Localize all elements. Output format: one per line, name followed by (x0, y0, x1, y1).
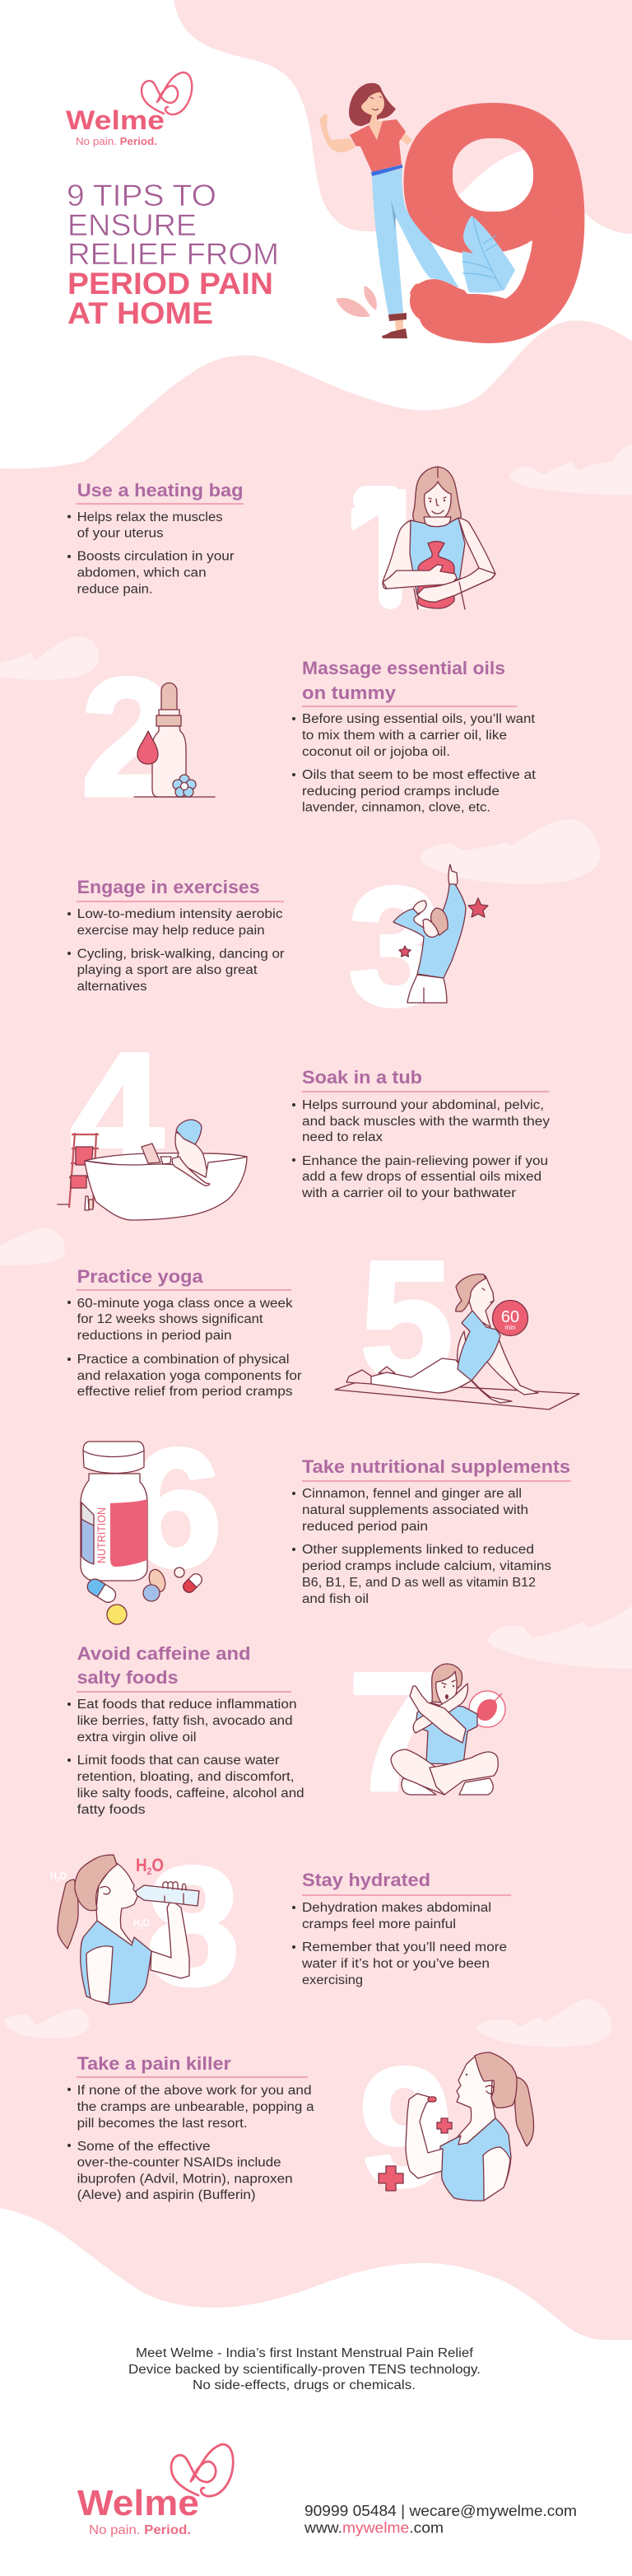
blue leaf (462, 216, 515, 293)
body text: water if it’s hot or you’ve been (301, 1957, 490, 1971)
body text: extra virgin olive oil (77, 1731, 197, 1745)
heading: Take nutritional supplements (302, 1456, 570, 1477)
closing statement: No side-effects, drugs or chemicals. (193, 2378, 416, 2392)
hero arm (319, 114, 356, 152)
hero jeans (372, 169, 459, 314)
body text: Eat foods that reduce inflammation (77, 1698, 297, 1712)
illustration: woman taking a pill (379, 2052, 534, 2201)
body text (292, 1487, 551, 1606)
body text: ibuprofen (Advil, Motrin), naproxen (77, 2172, 293, 2187)
body text: Practice a combination of physical (77, 1353, 290, 1367)
heading: Engage in exercises (77, 877, 260, 897)
panel: tip 7 avoid caffeine: salty foods (77, 1667, 179, 1688)
body text: B6, B1, E, and D as well as vitamin B12 (302, 1576, 536, 1590)
body text: and back muscles with the warmth they (302, 1115, 550, 1129)
logo swirl (142, 72, 192, 114)
panel: tip 6 supplements (81, 1414, 571, 1624)
body text: Oils that seem to be most effective at (302, 768, 537, 782)
background: top pink blob (174, 0, 632, 234)
illustration: woman drinking water: 2 (57, 1876, 60, 1884)
hero face details (370, 96, 382, 110)
footer tagline: No pain. Period. (89, 2523, 191, 2537)
body text: Before using essential oils, you’ll want (302, 712, 536, 726)
hero hair (349, 83, 396, 126)
body text (67, 510, 235, 596)
heading: Take a pain killer (77, 2053, 231, 2074)
body text: cramps feel more painful (302, 1917, 456, 1931)
panel: tip 1 heating bag (67, 455, 495, 643)
hero face and neck (361, 92, 384, 140)
body text: retention, bloating, and discomfort, (77, 1770, 295, 1784)
body text: 60-minute yoga class once a week (77, 1297, 293, 1311)
illustration: woman in bathtub (58, 1120, 247, 1220)
illustration: supplement bottle and pills (81, 1442, 204, 1624)
body text: period cramps include calcium, vitamins (302, 1559, 551, 1573)
body text (292, 712, 537, 815)
body text: over-the-counter NSAIDs include (77, 2155, 281, 2170)
9 gap (393, 216, 532, 299)
body text: Other supplements linked to reduced (302, 1543, 534, 1557)
title (67, 179, 279, 330)
illustration: woman drinking water: H (50, 1870, 58, 1882)
body text (67, 907, 285, 994)
logo wordmark: Welme (66, 105, 165, 135)
body text: If none of the above work for you and (77, 2084, 312, 2098)
body text: Cycling, brisk-walking, dancing or (77, 947, 285, 961)
body text: playing a sport are also great (77, 963, 258, 977)
heading: Avoid caffeine and (77, 1643, 251, 1664)
panel: tip 4 tub (58, 1018, 550, 1220)
hero rear arm (399, 132, 412, 145)
body text: reduce pain. (77, 582, 153, 596)
body text: need to relax (302, 1130, 383, 1144)
panel: tip 7 avoid caffeine (67, 1638, 505, 1826)
numeral 7: 7 (348, 1638, 442, 1826)
body text: add a few drops of essential oils mixed (302, 1170, 541, 1184)
title: AT HOME (67, 296, 213, 330)
closing statement: Device backed by scientifically-proven TENS technology. (128, 2363, 481, 2377)
body text: effective relief from period cramps (77, 1385, 293, 1399)
body text: Low-to-medium intensity aerobic (77, 907, 283, 921)
hero shirt (350, 119, 406, 172)
body text: reducing period cramps include (302, 785, 500, 799)
body text: alternatives (77, 980, 147, 994)
illustration: oil bottle with drop and flower (134, 683, 215, 797)
panel: tip 8 hydrated (50, 1833, 511, 2020)
illustration: woman drinking water (50, 1855, 199, 2005)
illustration: woman drinking water: 2 (140, 1923, 143, 1931)
body text: with a carrier oil to your bathwater (301, 1186, 516, 1200)
body text: abdomen, which can (77, 566, 207, 580)
H2O labels: 2 (147, 1866, 152, 1877)
background: main pink wave (0, 320, 632, 2340)
footer wordmark: Welme (77, 2483, 199, 2523)
pink leaves (336, 286, 377, 317)
illustration: woman in cobra pose: min (505, 1324, 515, 1331)
body text: fatty foods (77, 1803, 146, 1817)
body text: Helps surround your abdominal, pelvic, (302, 1098, 544, 1112)
illustration: woman drinking water: H (133, 1917, 141, 1929)
body text (67, 1698, 304, 1817)
heading: Soak in a tub (302, 1067, 422, 1088)
title: ENSURE (67, 208, 197, 242)
9 tail (410, 279, 527, 342)
body text: like salty foods, caffeine, alcohol and (77, 1786, 304, 1800)
clock label: 60 (501, 1308, 519, 1326)
panel: tip 2 essential oils (81, 644, 537, 831)
title: 9 TIPS TO (67, 179, 216, 212)
illustration: woman drinking water: O (60, 1870, 67, 1882)
body text: for 12 weeks shows significant (77, 1312, 263, 1326)
body text: natural supplements associated with (302, 1503, 528, 1517)
body text: Remember that you’ll need more (302, 1940, 507, 1954)
closing statement (128, 2346, 481, 2392)
body text: and fish oil (302, 1592, 369, 1606)
numeral 1 stem and flag (353, 486, 402, 609)
logo: Welme footer (77, 2444, 233, 2537)
contact details (304, 2502, 577, 2536)
H2O labels: H (136, 1855, 149, 1875)
numeral 1: 1 (342, 455, 435, 643)
heading: Stay hydrated (302, 1870, 430, 1890)
numeral 6: 6 (128, 1414, 222, 1602)
hero illustration: woman leaning on large 9 (319, 82, 584, 343)
body text (292, 1098, 550, 1200)
body text: reductions in period pain (77, 1329, 232, 1343)
numeral 5: 5 (360, 1227, 453, 1414)
logo: Welme header (66, 72, 192, 147)
body text: Cinnamon, fennel and ginger are all (302, 1487, 522, 1501)
illustration: dancing woman (393, 864, 488, 1003)
body text (292, 1901, 507, 1987)
body text: lavender, cinnamon, clove, etc. (302, 801, 490, 815)
body text: Limit foods that can cause water (77, 1754, 280, 1768)
panel: tip 5 yoga (67, 1227, 579, 1414)
numeral 8: 8 (146, 1833, 239, 2020)
contact details: 90999 05484 | wecare@mywelme.com (304, 2502, 577, 2519)
logo tagline: No pain. Period. (76, 136, 157, 147)
body text: the cramps are unbearable, popping a (77, 2100, 314, 2114)
closing statement: Meet Welme - India’s first Instant Menstrual Pain Relief (136, 2346, 474, 2360)
body text: (Aleve) and aspirin (Bufferin) (77, 2188, 256, 2202)
body text (67, 2084, 314, 2202)
body text: Boosts circulation in your (77, 550, 235, 564)
heading: Massage essential oils (302, 658, 505, 678)
contact details: www.mywelme.com (304, 2519, 444, 2536)
9 counter (436, 122, 550, 228)
illustration: woman in cobra pose (335, 1274, 579, 1409)
body text: reduced period pain (302, 1520, 428, 1534)
numeral 4: 4 (70, 1018, 164, 1206)
body text: Helps relax the muscles (77, 510, 223, 524)
panel: tip 9 pain killer (67, 2033, 534, 2221)
numeral 9: 9 (359, 2033, 453, 2221)
numeral 2: 2 (81, 644, 174, 831)
body text: exercising (302, 1973, 363, 1987)
body text (67, 1297, 302, 1399)
heading: Use a heating bag (77, 480, 244, 501)
title: PERIOD PAIN (67, 267, 273, 300)
panel: tip 3 exercises (67, 853, 488, 1041)
hero belt (371, 165, 402, 176)
body text: to mix them with a carrier oil, like (302, 729, 507, 743)
body text: Dehydration makes abdominal (302, 1901, 491, 1915)
body text: exercise may help reduce pain (77, 924, 265, 938)
bottle label: NUTRITION (95, 1507, 108, 1563)
illustration: woman drinking water: O (143, 1917, 150, 1929)
heading: Practice yoga (77, 1266, 203, 1287)
body text: Enhance the pain-relieving power if you (302, 1154, 548, 1168)
H2O labels: O (151, 1855, 164, 1875)
body text: like berries, fatty fish, avocado and (77, 1714, 293, 1728)
numeral 3: 3 (348, 853, 442, 1041)
panel: tip 2 essential oils: on tummy (302, 682, 397, 703)
illustration: cross-legged woman with crossed arms (391, 1664, 505, 1795)
body text: and relaxation yoga components for (77, 1369, 302, 1383)
footer logo swirl (171, 2444, 233, 2496)
body text: Some of the effective (77, 2140, 211, 2154)
body text: pill becomes the last resort. (77, 2117, 248, 2131)
title: RELIEF FROM (67, 237, 279, 271)
illustration: woman holding hot water bag (383, 467, 495, 609)
big number 9: 9 (394, 36, 595, 408)
numeral 1 base cover (346, 576, 420, 613)
cuff and shoe (395, 319, 403, 331)
body text: coconut oil or jojoba oil. (302, 745, 450, 759)
body text: of your uterus (77, 527, 164, 540)
background: translucent clouds (0, 444, 632, 2047)
